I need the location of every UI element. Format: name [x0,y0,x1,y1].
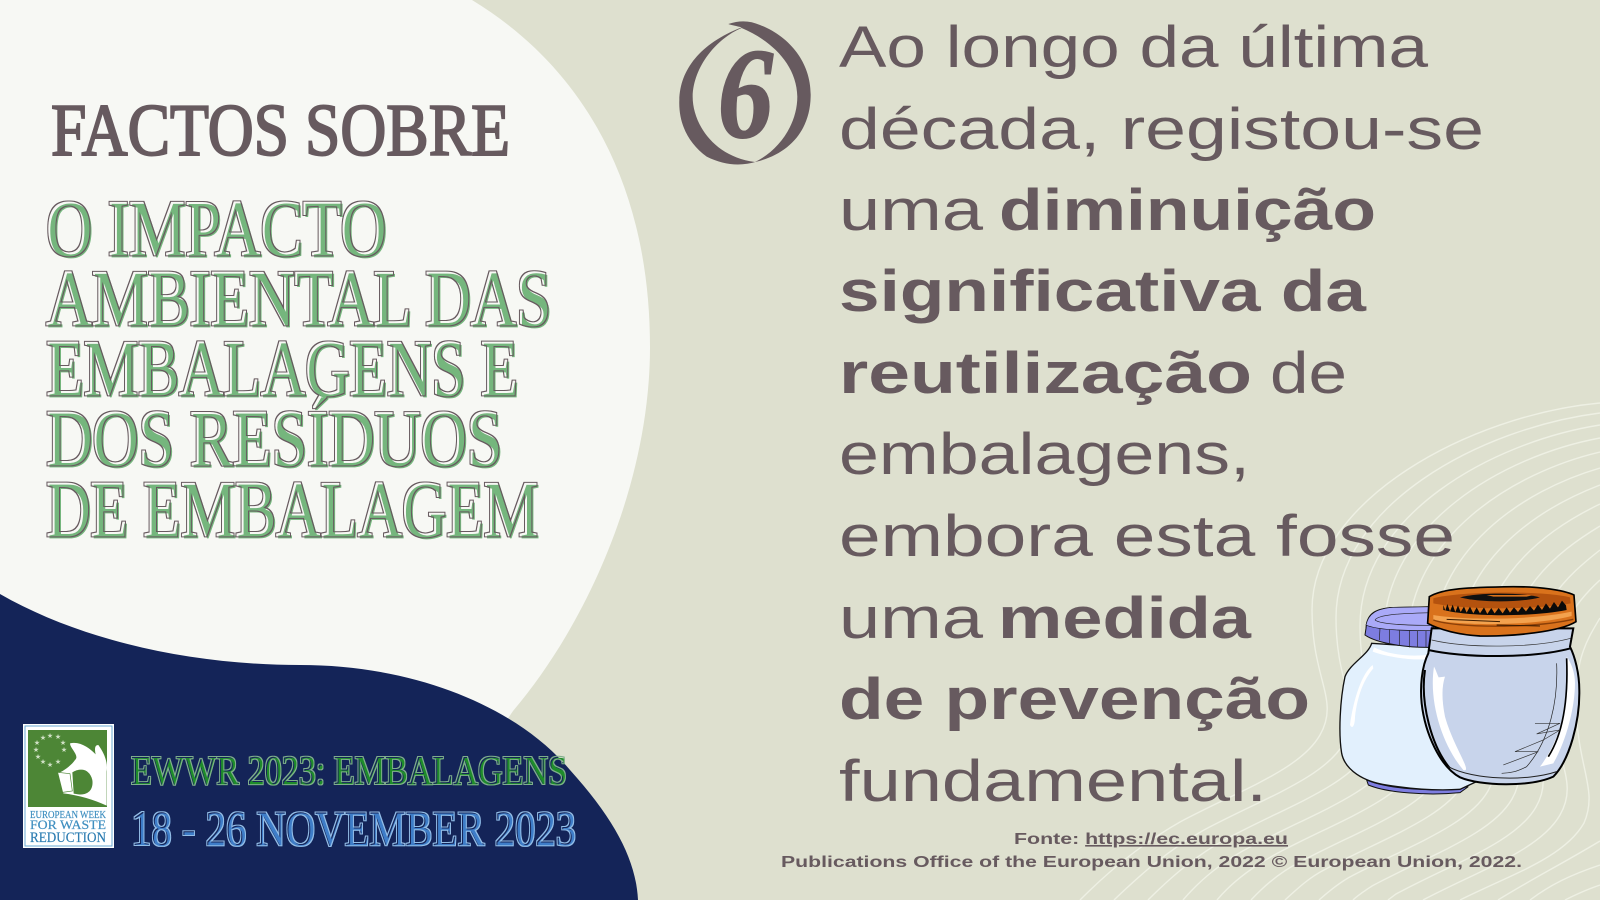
icon: EU stars: ★ [55,758,61,766]
body text [839,15,1484,814]
source text: Fonte: https://ec.europa.eu [1014,831,1288,848]
icon: EU stars: ★ [61,746,67,754]
source text: Publications Office of the European Union, 2022 © European Union, 2022. [781,854,1522,871]
logo text: REDUCTION [30,830,106,846]
icon: number six in circle [679,21,811,165]
heading: green title: AMBIENTAL DAS [46,255,551,343]
body text: década, registou-se [839,97,1484,162]
icon: EU stars [33,732,67,769]
event name: EWWR 2023: EMBALAGENS [131,747,567,793]
event dates: 18 - 26 NOVEMBER 2023 [131,800,576,856]
logo text [30,810,107,846]
icon: EU stars: ★ [34,739,40,747]
heading: green title: O IMPACTO [46,185,386,273]
heading: green title [46,185,551,554]
icon: number six in circle: 6 [718,23,773,165]
icon: EU stars: ★ [47,732,53,740]
icon: EU stars: ★ [40,758,46,766]
logo: European Week for Waste Reduction [23,724,114,848]
icon: hand holding container [58,743,107,806]
body text: embora esta fosse [839,504,1455,569]
body text: diminuição [999,178,1376,243]
panel: navy footer wave [0,594,638,900]
white jar with purple lid [1340,607,1480,794]
body text: de [1270,341,1347,406]
logo text: FOR WASTE [30,817,106,832]
source text [781,831,1522,871]
icon: EU stars: ★ [35,753,41,761]
body text: fundamental. [839,749,1267,814]
heading: green title: EMBALAGENS E [46,325,518,413]
icon: EU stars: ★ [33,746,39,754]
body text: embalagens, [839,422,1250,487]
heading: factos sobre: FACTOS SOBRE [51,90,510,172]
icon: EU stars: ★ [60,739,66,747]
body text: medida [998,586,1252,651]
panel: white blob [0,0,650,760]
icon: jars [1340,587,1579,794]
icon: EU stars: ★ [55,733,61,741]
heading: green title: DOS RESÍDUOS [46,395,502,483]
body text: uma [839,586,984,651]
glass jar with orange lid [1421,587,1579,784]
icon: EU stars: ★ [40,734,46,742]
icon: EU stars: ★ [47,761,53,769]
logo text: EUROPEAN WEEK [30,810,107,821]
heading: green title: DE EMBALAGEM [46,466,538,554]
body text: significativa da [839,259,1367,324]
body text: uma [839,178,984,243]
background contour lines [1080,403,1600,900]
body text: de prevenção [839,667,1310,732]
body text: reutilização [839,341,1252,406]
body text: Ao longo da última [839,15,1429,80]
